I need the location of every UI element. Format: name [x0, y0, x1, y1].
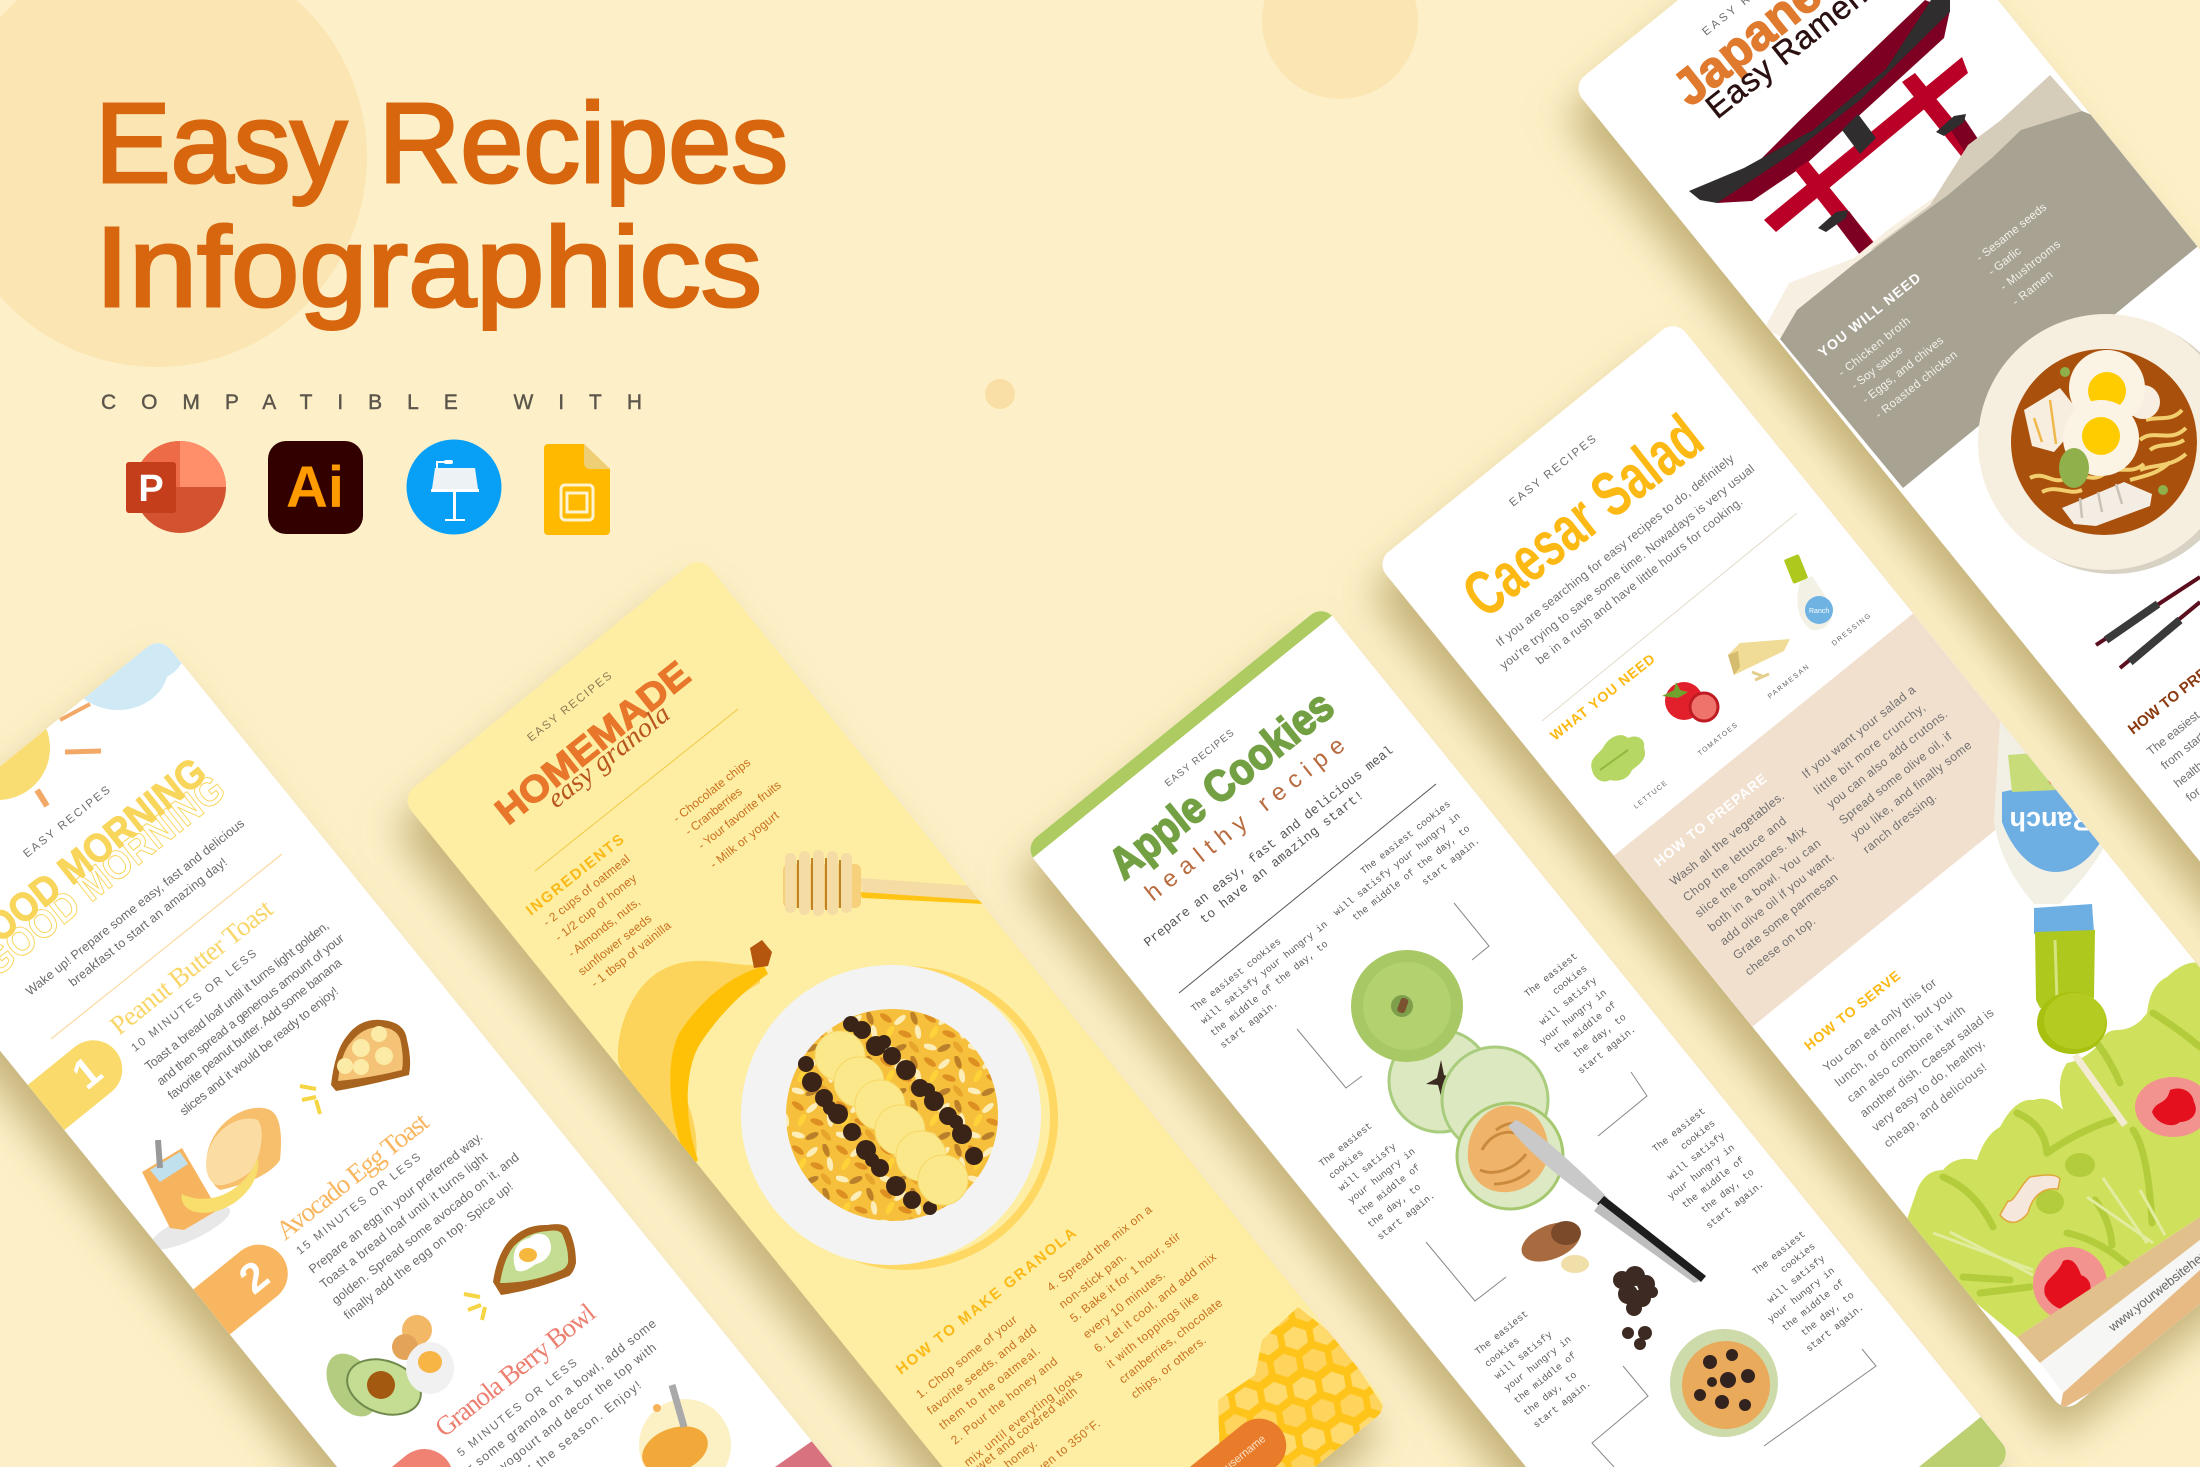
- panel: apple cookies card: [1024, 605, 2012, 1467]
- icon: salad lettuce: [1900, 963, 2200, 1337]
- subtitle: compatible with: COMPATIBLE WITH: [101, 391, 642, 414]
- text: how to prepare: both in a bowl. You can: [1705, 836, 1823, 934]
- icon: banana: [618, 940, 772, 1177]
- wood tray bottom: [2060, 1270, 2200, 1410]
- panel: homemade granola card: [401, 556, 1392, 1467]
- icon: granola plate: [741, 965, 1058, 1270]
- icon: illustrator: [268, 441, 363, 534]
- step 1 badge: [28, 1040, 122, 1130]
- wood tray: [2017, 1217, 2200, 1363]
- text: you will need: - Chicken broth: [1836, 314, 1913, 379]
- step 1 text: [104, 893, 347, 1118]
- text: intro: to have an amazing start!: [1197, 788, 1367, 927]
- text: how to make granola: 6. Let it cool, and add mix: [1091, 1250, 1219, 1355]
- text: you will need: [1815, 201, 2063, 421]
- icon: banana toast: [331, 1020, 410, 1091]
- heading: easy granola: easy granola: [541, 698, 676, 814]
- text: intro: you're trying to save some time. Nowadays is very usual: [1497, 462, 1757, 672]
- card 4 background: [1376, 320, 2200, 1413]
- label: dressing: DRESSING: [1831, 613, 1872, 648]
- text block F: will satisfy: [1765, 1253, 1827, 1306]
- step 2 text: [280, 1116, 520, 1320]
- text block E: your hungry in: [1666, 1142, 1737, 1202]
- text: how to serve: [1801, 967, 1997, 1150]
- icon: peanuts: [1516, 1215, 1589, 1273]
- background circle: large: [0, 0, 367, 367]
- text: intro: Prepare an easy, fast and delicious meal: [1141, 743, 1396, 950]
- step 1 badge: 1: [63, 1047, 111, 1098]
- text: how to prepare: ranch dressing.: [1860, 789, 1939, 856]
- text block C: the day, to: [1571, 1012, 1629, 1061]
- text block D: cookies: [1327, 1147, 1366, 1182]
- text block D: the middle of: [1356, 1162, 1423, 1218]
- step 1 text: favorite peanut butter. Add some banana: [165, 956, 344, 1102]
- card 4 content: [1449, 401, 2200, 1410]
- text: how to make granola: 1. Chop some of your: [913, 1313, 1020, 1401]
- text block C: will satisfy: [1537, 975, 1599, 1028]
- text: how to serve: very easy to do, healthy,: [1869, 1036, 1987, 1134]
- heading: caesar salad: Caesar Salad: [1449, 401, 1716, 631]
- label: easy recipes: EASY RECIPES: [525, 670, 615, 744]
- text: you will need: - Mushrooms: [1998, 238, 2063, 293]
- text: how to serve: HOW TO SERVE: [1801, 967, 1903, 1053]
- text: you will need: - Sesame seeds: [1974, 201, 2049, 264]
- text block D: The easiest: [1317, 1120, 1374, 1169]
- label: lettuce: LETTUCE: [1633, 780, 1669, 811]
- icon: sparkle rays: [464, 1294, 485, 1320]
- step 2 text: Prepare an egg in your preferred way.: [306, 1130, 485, 1276]
- text: how to prepare: cheese on top.: [1742, 914, 1818, 978]
- text: ingredients: INGREDIENTS: [523, 831, 627, 919]
- background circle: top: [1262, 0, 1418, 99]
- text: how to serve: another dish. Caesar salad is: [1857, 1005, 1997, 1120]
- green bottom band: [1682, 1417, 2012, 1467]
- text block C: The easiest: [1522, 951, 1580, 1000]
- icon: jar, bread and banana: [142, 1108, 281, 1257]
- background circle: small: [985, 379, 1015, 409]
- card 1 content: [0, 618, 845, 1467]
- icon: keynote: [406, 440, 502, 534]
- step 2 text: golden. Spread some avocado on it, and: [329, 1150, 522, 1307]
- heading: homemade: HOMEMADE: [487, 653, 698, 832]
- icon: ranch bottle: [1994, 713, 2112, 1008]
- text: how to prepare: you can also add crutons.: [1824, 707, 1950, 811]
- text: ingredients: - 2 cups of oatmeal: [540, 852, 633, 929]
- icon: chopsticks: [2096, 577, 2200, 668]
- text block G: will satisfy: [1492, 1329, 1555, 1382]
- icon: chocolate chips: [1613, 1266, 1658, 1350]
- text: you will need: - Ramen: [2010, 268, 2055, 308]
- text block C: your hungry in: [1538, 987, 1609, 1047]
- text: how to make granola: HOW TO MAKE GRANOLA: [893, 1225, 1080, 1378]
- icon: ramen bowl: [1978, 314, 2200, 574]
- icon: knife: [1508, 1120, 1706, 1283]
- text: how to serve: cheap, and delicious!: [1881, 1060, 1989, 1150]
- text: how to make granola: 2. Pour the honey and: [948, 1354, 1060, 1447]
- text: how to prepare: HOW TO PREPARE: [1651, 770, 1770, 869]
- gray section: [1780, 111, 2200, 488]
- text: how to prepare: If you want your salad a: [1799, 682, 1918, 781]
- text block B: The easiest cookies: [1359, 799, 1453, 877]
- card 2 content: [487, 653, 1392, 1467]
- icon: chicken piece: [2000, 1175, 2060, 1222]
- text block D: the day, to: [1366, 1181, 1423, 1230]
- text: ingredients: sunflower seeds: [575, 911, 654, 978]
- icon: ranch bottle: Ranch: [2009, 806, 2092, 836]
- text: how to serve: You can eat only this for: [1820, 976, 1939, 1074]
- icon: tomato slice lower: [2033, 1247, 2107, 1321]
- icon: avocado and eggs: [326, 1315, 454, 1416]
- step 2 text: 15 MINUTES OR LESS: [294, 1151, 423, 1257]
- icon: sparkle rays: [300, 1086, 320, 1114]
- label: parmesan: PARMESAN: [1767, 664, 1810, 701]
- icon: google slides: [544, 444, 610, 535]
- text: ingredients: - Milk or yogurt: [707, 808, 782, 871]
- text block A: will satisfy your hungry in: [1199, 919, 1330, 1027]
- step 1 text: Peanut Butter Toast: [104, 893, 279, 1041]
- panel: good morning card: [0, 618, 849, 1467]
- green top band: [1024, 605, 1332, 858]
- text block A: start again.: [1218, 998, 1280, 1051]
- text: how to make granola: [893, 1202, 1225, 1467]
- icon: cookie: [1670, 1329, 1778, 1437]
- text block F: the middle of: [1780, 1278, 1847, 1334]
- text: ingredients: [523, 755, 784, 990]
- label: easy recipes: EASY RECIPES: [21, 784, 113, 860]
- text block F: cookies: [1779, 1241, 1818, 1275]
- icon: bottle cap: [2037, 992, 2107, 1054]
- heading: healthy recipe: healthy recipe: [1140, 732, 1350, 907]
- icon: apple slices and peanut butter: [1351, 950, 1563, 1209]
- text block E: cookies: [1679, 1118, 1718, 1152]
- text block C: the middle of: [1552, 1000, 1619, 1056]
- icon: honeycomb: [1218, 1307, 1392, 1467]
- icon: powerpoint: P: [138, 468, 164, 510]
- text: how to prepare: Wash all the vegetables.: [1667, 789, 1787, 888]
- icon: dressing bottle: Ranch: [1809, 608, 1829, 615]
- step 2 badge: [193, 1244, 288, 1334]
- card 3 background: [1024, 605, 2012, 1467]
- heading: apple cookies: Apple Cookies: [1100, 681, 1343, 889]
- text: how to serve: can also combine it with: [1844, 1003, 1968, 1105]
- step 3 text: 5 MINUTES OR LESS: [455, 1357, 580, 1459]
- step 1 text: and then spread a generous amount of your: [154, 931, 347, 1088]
- text block G: The easiest: [1473, 1308, 1530, 1357]
- text: how to prepare: add olive oil if you want.: [1717, 849, 1837, 948]
- icon: honey dipper: [783, 850, 984, 916]
- beige band: [1614, 613, 2052, 1027]
- step 3 text: Granola Berry Bowl: [429, 1297, 601, 1443]
- text: how to prepare: [1651, 682, 1974, 978]
- label: tomatoes: TOMATOES: [1697, 722, 1739, 758]
- card 5 content: [1662, 0, 2200, 804]
- text: intro: If you are searching for easy recipes to do, definitely: [1493, 451, 1737, 649]
- title: Infographics: [95, 204, 762, 330]
- text: intro: breakfast to start an amazing day!: [66, 855, 230, 989]
- icon: powerpoint: [126, 441, 226, 533]
- panel: japanese ramen card: [1572, 0, 2200, 937]
- text block E: the day, to: [1699, 1167, 1757, 1216]
- text block G: start again.: [1531, 1378, 1593, 1431]
- icon: dressing bottle: [1784, 554, 1833, 630]
- text block C: start again.: [1576, 1024, 1638, 1077]
- card 2 background: [401, 556, 1389, 1467]
- step 3 badge: [392, 1449, 451, 1467]
- icon: sun and sky: [0, 643, 182, 808]
- text block E: start again.: [1704, 1179, 1766, 1232]
- mountains: beige layer: [1870, 75, 2082, 250]
- icon: parmesan: [1728, 639, 1790, 680]
- text: how to make granola: it with toppings like: [1103, 1289, 1202, 1371]
- text: you will need: - Roasted chicken: [1873, 348, 1960, 421]
- card 5 background: [1572, 0, 2200, 937]
- text: how to make granola: chips, or others.: [1128, 1333, 1209, 1401]
- text: ingredients: - Your favorite fruits: [695, 778, 784, 852]
- text block B: start again.: [1420, 835, 1482, 888]
- icon: illustrator: Ai: [286, 455, 344, 520]
- heading: what you need: WHAT YOU NEED: [1547, 651, 1658, 743]
- step 2 badge: 2: [230, 1251, 278, 1303]
- step 1 text: slices and it would be ready to enjoy!: [177, 984, 341, 1118]
- text block F: The easiest: [1750, 1229, 1808, 1278]
- text: how to prepare: little bit more crunchy,: [1811, 700, 1928, 797]
- text: how to serve: lunch, or dinner, but you: [1832, 988, 1955, 1089]
- text block B: the middle of the day, to: [1350, 823, 1472, 923]
- mountains: cream layer: [1764, 90, 2100, 345]
- text block D: start again.: [1375, 1190, 1437, 1243]
- text block A: the middle of the day, to: [1208, 939, 1330, 1039]
- card 3 content: [1024, 605, 2012, 1467]
- step 2 text: Toast a bread loaf until it turns light: [317, 1149, 491, 1291]
- text: how to make granola: non-stick pan.: [1056, 1249, 1129, 1311]
- card 1 background: [0, 637, 849, 1467]
- text block B: will satisfy your hungry in: [1331, 811, 1463, 918]
- text: ingredients: - 1/2 cup of honey: [552, 871, 639, 944]
- icon: tomato slice upper: [2135, 1077, 2200, 1137]
- text block F: start again.: [1804, 1302, 1866, 1355]
- step 2 text: Avocado Egg Toast: [270, 1106, 435, 1246]
- text block F: your hungry in: [1766, 1265, 1837, 1325]
- text: intro: be in a rush and have little hours for cooking.: [1533, 495, 1745, 667]
- text block G: cookies: [1483, 1335, 1522, 1370]
- icon: granola bowl: [636, 1385, 731, 1467]
- text: you will need: - Eggs, and chives: [1860, 334, 1946, 406]
- button: username: [1150, 1408, 1297, 1467]
- text: ingredients: - 1 tbsp of vainilla: [588, 918, 674, 990]
- text block E: the middle of: [1680, 1155, 1747, 1211]
- text block D: will satisfy: [1336, 1141, 1399, 1194]
- step 1 text: Toast a bread loaf until it turns light golden,: [142, 919, 332, 1073]
- title: Easy Recipes: [95, 80, 788, 206]
- text block E: will satisfy: [1665, 1130, 1727, 1183]
- text: ingredients: - Chocolate chips: [670, 755, 753, 825]
- title: [95, 80, 788, 330]
- text: how to prepare: [2125, 640, 2200, 804]
- text block E: The easiest: [1650, 1106, 1708, 1155]
- text block F: the day, to: [1799, 1290, 1857, 1339]
- label: easy recipes: EASY RECIPES: [1507, 433, 1599, 509]
- text: how to make granola: favorite seeds, and add: [924, 1322, 1039, 1417]
- label: easy recipes: EASY RECIPES: [1163, 728, 1237, 789]
- step 1 text: 10 MINUTES OR LESS: [129, 948, 259, 1054]
- text: how to prepare: Chop the lettuce and: [1680, 814, 1789, 904]
- text: how to make granola: every 10 minutes.: [1080, 1268, 1168, 1341]
- text block G: the day, to: [1522, 1369, 1579, 1418]
- text block G: the middle of: [1512, 1350, 1579, 1406]
- footer strip: [2040, 1240, 2200, 1393]
- text: how to make granola: 5. Bake it for 1 hour, stir: [1067, 1229, 1183, 1325]
- text: how to prepare: slice the tomatoes. Mix: [1692, 823, 1809, 920]
- icon: lettuce: [1591, 735, 1645, 782]
- text: how to make granola: mix until everyting looks: [961, 1367, 1085, 1467]
- text: how to prepare: Grate some parmesan: [1730, 870, 1841, 962]
- footer band: [775, 1441, 832, 1467]
- text: how to prepare: you like, and finally some: [1848, 738, 1974, 842]
- text: ingredients: - Cranberries: [682, 784, 745, 838]
- text block D: your hungry in: [1346, 1146, 1418, 1206]
- text block C: cookies: [1551, 963, 1590, 997]
- text: intro: Wake up! Prepare some easy, fast and delicious: [23, 816, 247, 998]
- icon: avocado toast: [493, 1224, 576, 1295]
- text: how to make granola: cranberries, chocolate: [1116, 1296, 1225, 1386]
- text: how to make granola: them to the oatmeal.: [936, 1344, 1043, 1432]
- panel: caesar salad card: [1376, 320, 2200, 1413]
- text block G: your hungry in: [1502, 1334, 1574, 1394]
- text: ingredients: - Almonds, nuts,: [565, 895, 643, 960]
- text: you will need: YOU WILL NEED: [1815, 269, 1923, 360]
- text block A: The easiest cookies: [1189, 936, 1283, 1014]
- icon: tomatoes: [1662, 682, 1718, 721]
- step 2 text: finally add the egg on top. Spice up!: [341, 1179, 516, 1322]
- icon: torii gate: [1689, 0, 1982, 259]
- text: you will need: - Soy sauce: [1849, 344, 1905, 392]
- text: how to make granola: 4. Spread the mix on a: [1044, 1202, 1155, 1294]
- text: you will need: - Garlic: [1986, 244, 2024, 278]
- text: how to prepare: Spread some olive oil, if: [1836, 729, 1955, 827]
